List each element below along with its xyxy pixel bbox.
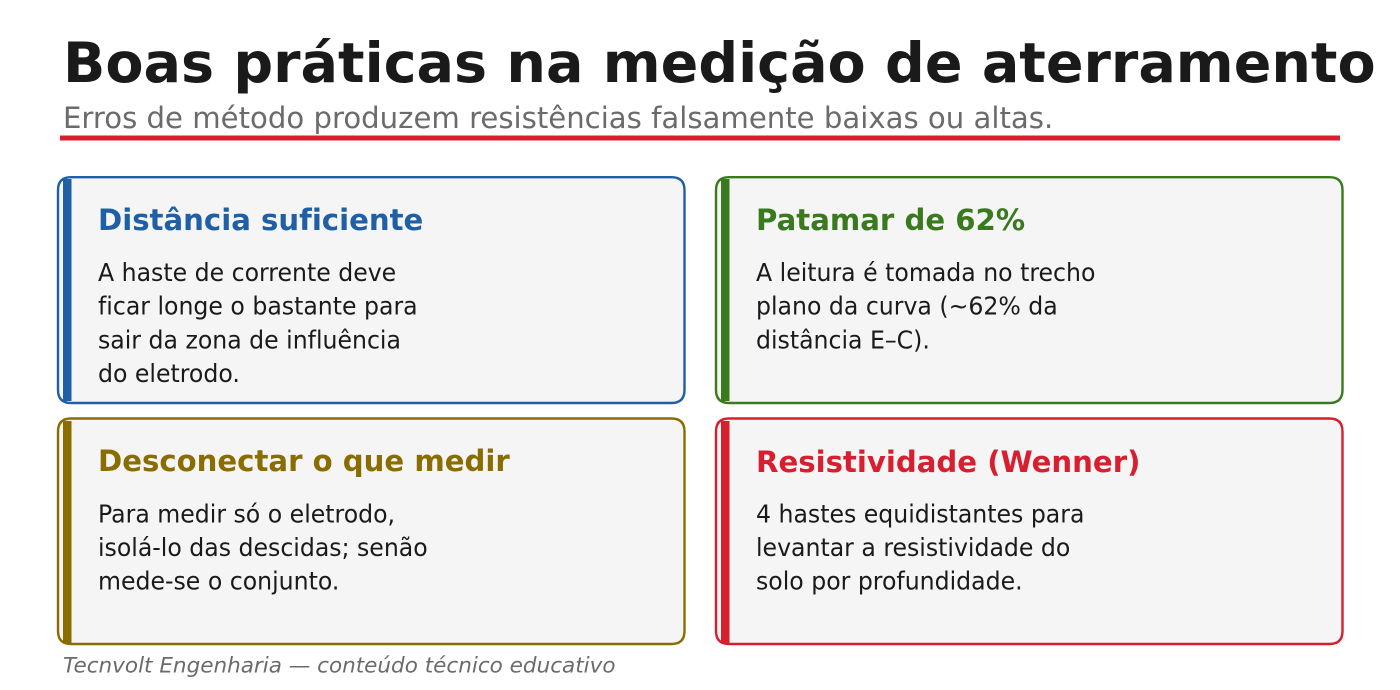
text: desconectar o que medir: Para medir só o eletrodo, [98, 499, 395, 528]
text: distância suficiente [98, 257, 418, 388]
heading: resistividade (wenner): Resistividade (Wenner) [756, 445, 1140, 479]
text: desconectar o que medir: isolá-lo das descidas; senão [98, 532, 428, 562]
text: distância suficiente: A haste de corrente deve [98, 257, 396, 287]
panel: patamar de 62% [716, 177, 1342, 403]
panel: desconectar o que medir [58, 418, 684, 644]
text: desconectar o que medir: mede-se o conjunto. [98, 566, 339, 596]
heading: distância suficiente: Distância suficiente [98, 203, 423, 237]
red rule [60, 136, 1340, 140]
text: resistividade (wenner): solo por profundidade. [756, 566, 1023, 596]
title: Boas práticas na medição de aterramento [63, 31, 1376, 96]
heading: desconectar o que medir: Desconectar o que medir [98, 444, 510, 478]
text: patamar de 62%: A leitura é tomada no trecho [756, 257, 1095, 287]
text: distância suficiente: do eletrodo. [98, 358, 240, 388]
panel: distância suficiente [58, 177, 684, 403]
subtitle: Erros de método produzem resistências falsamente baixas ou altas. [63, 101, 1053, 135]
heading: patamar de 62%: Patamar de 62% [756, 203, 1025, 237]
text: patamar de 62%: plano da curva (~62% da [756, 291, 1058, 321]
footer note: Tecnvolt Engenharia — conteúdo técnico educativo [63, 654, 616, 678]
text: desconectar o que medir [98, 499, 428, 596]
text: resistividade (wenner): levantar a resistividade do [756, 532, 1070, 562]
text: resistividade (wenner): 4 hastes equidistantes para [756, 499, 1084, 528]
text: distância suficiente: sair da zona de influência [98, 325, 401, 354]
text: distância suficiente: ficar longe o bastante para [98, 291, 418, 321]
text: patamar de 62%: distância E–C). [756, 325, 930, 354]
text: resistividade (wenner) [756, 499, 1084, 596]
text: patamar de 62% [756, 257, 1095, 354]
panel: resistividade (wenner) [716, 418, 1342, 644]
